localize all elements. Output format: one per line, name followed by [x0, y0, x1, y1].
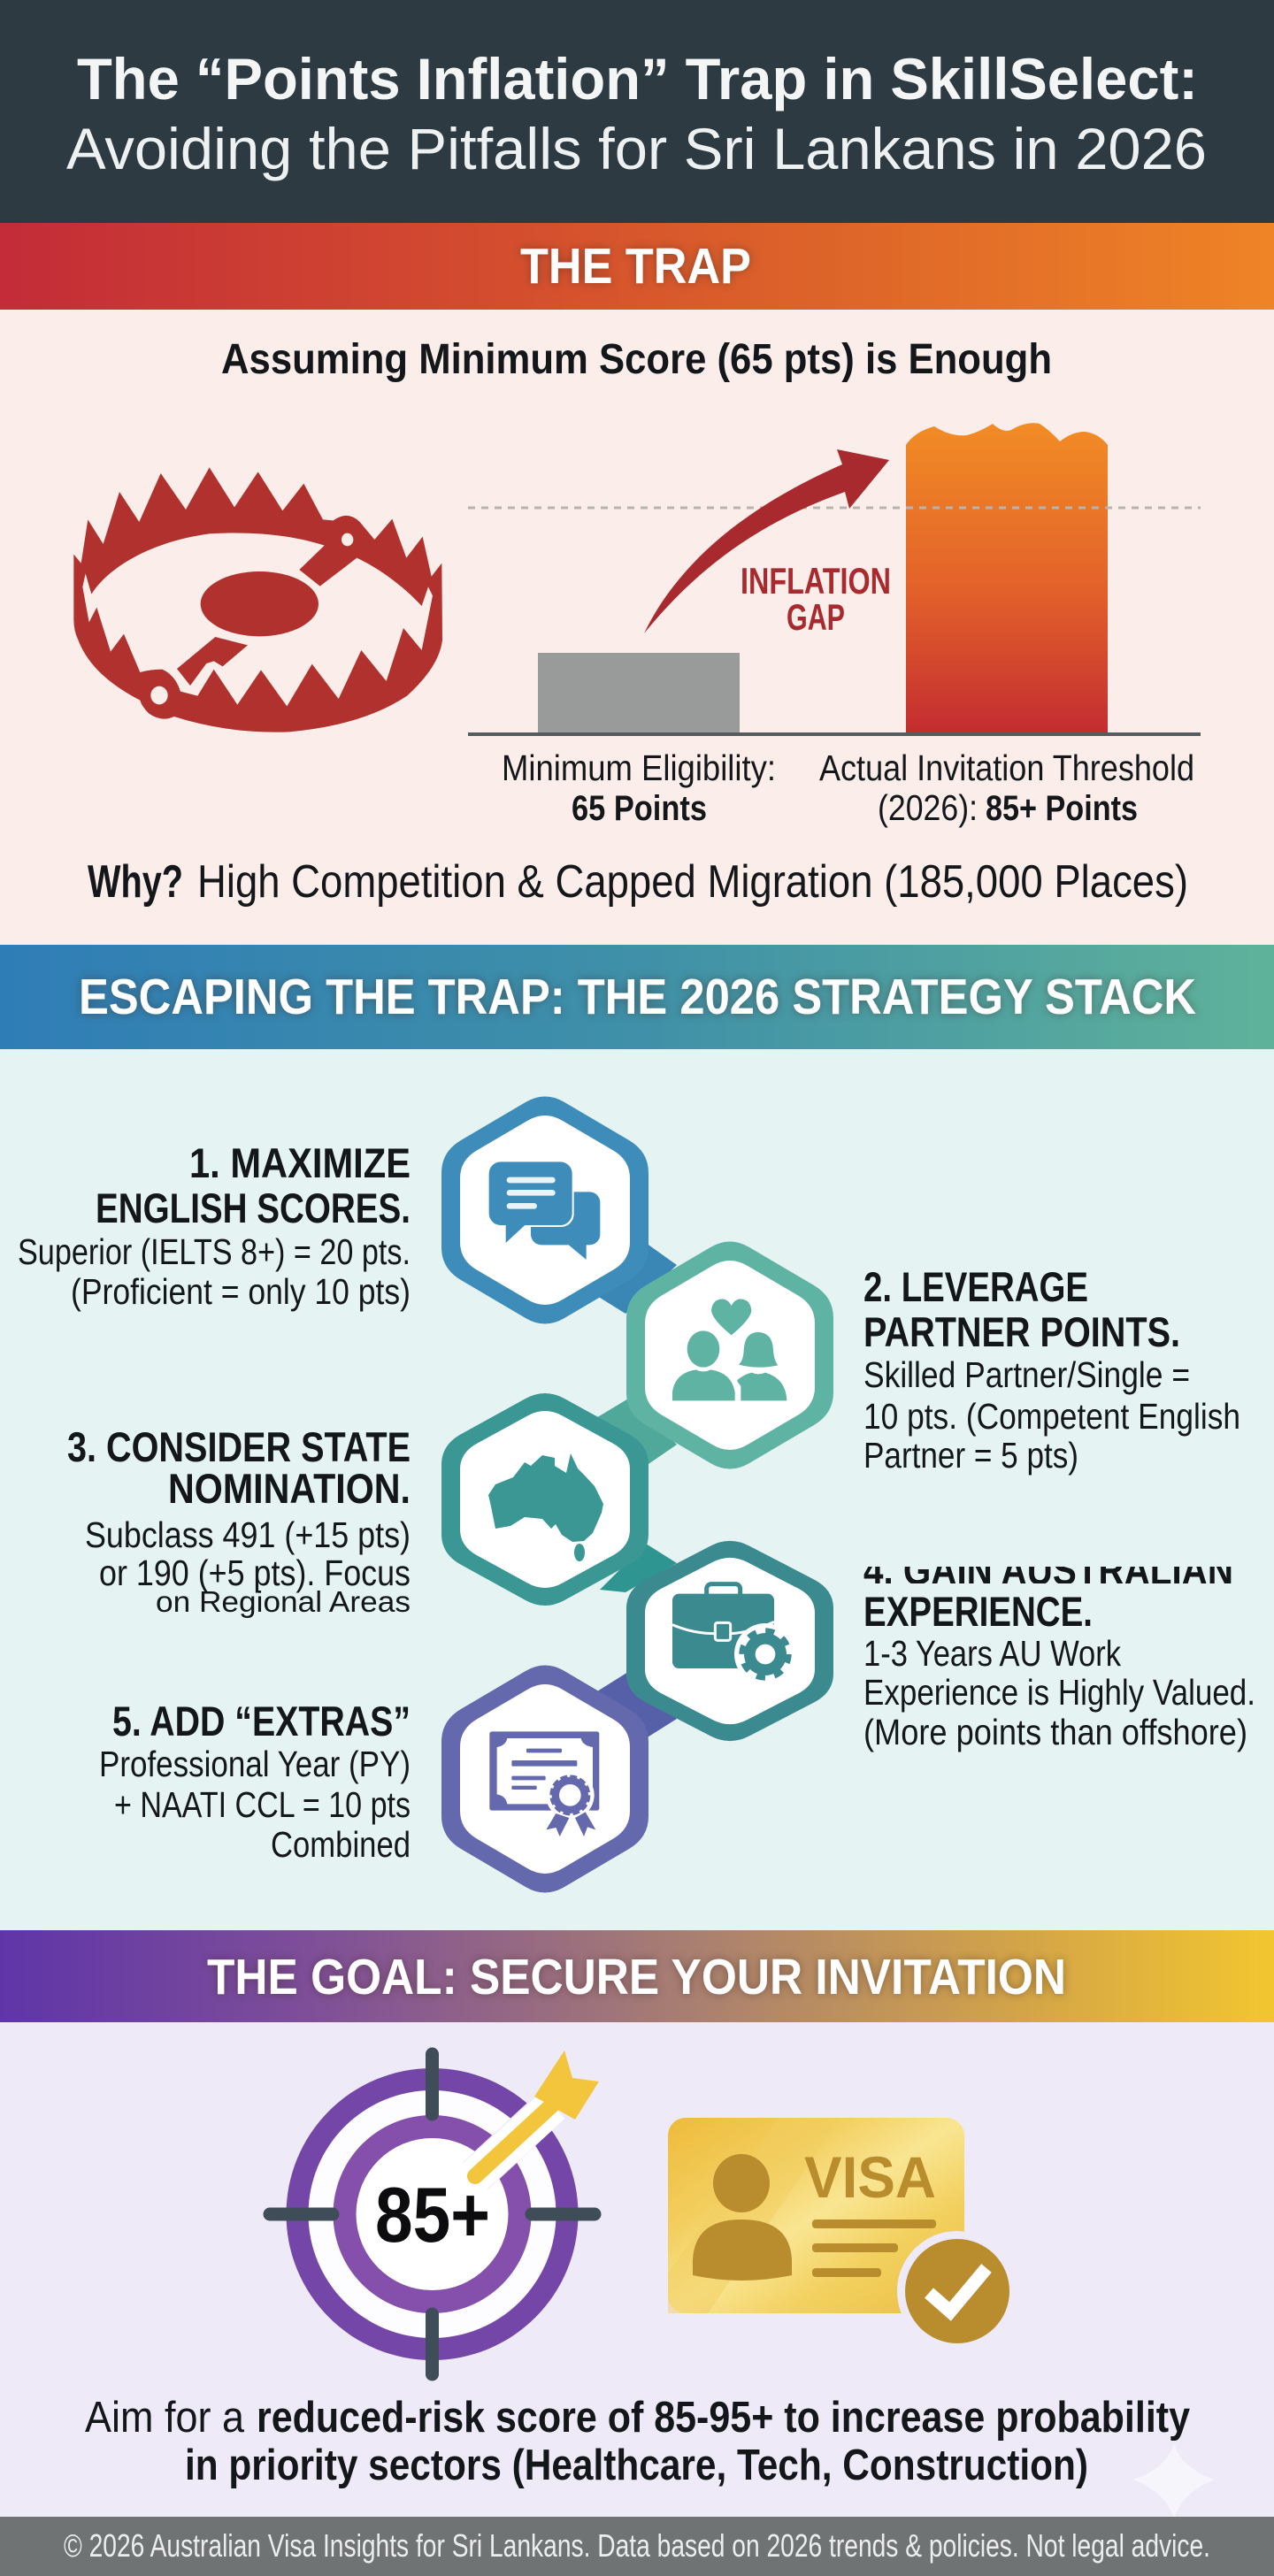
text: step 4: EXPERIENCE. [863, 1588, 1093, 1635]
hexagon 1: english [441, 1097, 649, 1323]
text: step 1: Superior (IELTS 8+) = 20 pts. [18, 1231, 411, 1272]
text: step 3: 3. CONSIDER STATE [67, 1423, 411, 1470]
icon: target [270, 2051, 599, 2374]
text: step 1: (Proficient = only 10 pts) [71, 1271, 411, 1312]
text: step 1 [18, 1139, 411, 1312]
label: actual invitation threshold: (2026): [878, 787, 978, 828]
text: step 2 [863, 1263, 1240, 1476]
text: step 2: 2. LEVERAGE [863, 1263, 1088, 1310]
text: step 1: 1. MAXIMIZE [189, 1139, 411, 1186]
subtitle: Assuming Minimum Score (65 pts) is Enough [221, 336, 1052, 383]
text: step 1: ENGLISH SCORES. [96, 1184, 411, 1231]
chart: points gap [468, 423, 1201, 828]
text: step 2: PARTNER POINTS. [863, 1308, 1180, 1355]
panel: header [0, 0, 1274, 223]
text: aim line 2: in priority sectors (Healthcare, Tech, Construction) [185, 2442, 1088, 2489]
label: minimum eligibility [502, 748, 776, 828]
hexagon 5: extras [441, 1665, 649, 1893]
text: why: Why? [88, 856, 183, 908]
title line 1: The “Points Inflation” Trap in SkillSelect: [77, 46, 1198, 111]
text: step 5 [99, 1698, 411, 1865]
connector: 1 to 2 [597, 1243, 677, 1314]
text: step 5: 5. ADD “EXTRAS” [112, 1698, 411, 1744]
text: step 3: or 190 (+5 pts). Focus [99, 1552, 411, 1593]
text: aim line 1: Aim for a [85, 2394, 245, 2442]
icon: sparkle watermark [1133, 2443, 1215, 2519]
bar: actual threshold [906, 423, 1108, 734]
arrow in target [475, 2051, 599, 2176]
text: step 2: Partner = 5 pts) [863, 1435, 1078, 1476]
visa label: VISA [804, 2144, 936, 2210]
hexagon 4: australian experience [626, 1541, 833, 1741]
text: step 4: 1-3 Years AU Work [863, 1633, 1121, 1674]
trap lower arm [177, 637, 248, 686]
label: inflation gap: GAP [787, 596, 845, 638]
icon: briefcase and gear [672, 1584, 796, 1685]
label: minimum eligibility: 65 Points [572, 789, 707, 828]
text: step 5: + NAATI CCL = 10 pts [114, 1784, 411, 1825]
connector: 4 to 5 [597, 1672, 677, 1738]
title line 2: Avoiding the Pitfalls for Sri Lankans in 2026 [66, 116, 1207, 181]
icon: couple with heart [672, 1299, 787, 1400]
score: 85+: 85+ [375, 2171, 490, 2258]
label: inflation gap: INFLATION [741, 560, 891, 602]
icon: chat bubbles [487, 1160, 600, 1260]
icon: australia map [488, 1453, 603, 1561]
icon: bear trap [73, 467, 442, 732]
band: the goal [0, 1930, 1274, 2022]
text: step 2: Skilled Partner/Single = [863, 1354, 1190, 1395]
label: actual invitation threshold: 85+ Points [986, 789, 1138, 828]
panel: the goal [0, 1930, 1274, 2519]
label: actual invitation threshold [819, 748, 1194, 828]
connector: 2 to 3 [595, 1398, 677, 1466]
icon: certificate [489, 1731, 599, 1836]
icon: visa card [668, 2118, 1017, 2351]
text: step 5: Professional Year (PY) [99, 1744, 411, 1784]
footer [0, 2517, 1274, 2576]
text: step 3: Subclass 491 (+15 pts) [85, 1514, 411, 1555]
bar: minimum eligibility [538, 653, 740, 734]
text: step 4 [863, 1567, 1253, 1752]
arrow: inflation [644, 449, 889, 633]
heading: the trap: THE TRAP [520, 238, 751, 295]
connector: 3 to 4 [600, 1544, 677, 1592]
text: step 3: on Regional Areas [156, 1585, 411, 1618]
band: the trap [0, 223, 1274, 310]
text: step 3: NOMINATION. [168, 1465, 411, 1512]
band: escaping the trap [0, 945, 1274, 1049]
text: step 3 [67, 1423, 411, 1618]
heading: the goal: THE GOAL: SECURE YOUR INVITATION [207, 1949, 1066, 2005]
trap plate [201, 571, 318, 636]
icon: check badge [897, 2231, 1017, 2351]
panel: strategy stack [0, 945, 1274, 1931]
label: inflation gap [741, 560, 891, 638]
hexagon 3: state nomination [441, 1393, 649, 1606]
label: actual invitation threshold: Actual Invitation Threshold [819, 748, 1194, 788]
hexagon 2: partner [626, 1242, 833, 1468]
panel: the trap [0, 223, 1274, 945]
label: minimum eligibility: Minimum Eligibility: [502, 748, 776, 788]
text: step 5: Combined [271, 1824, 411, 1865]
